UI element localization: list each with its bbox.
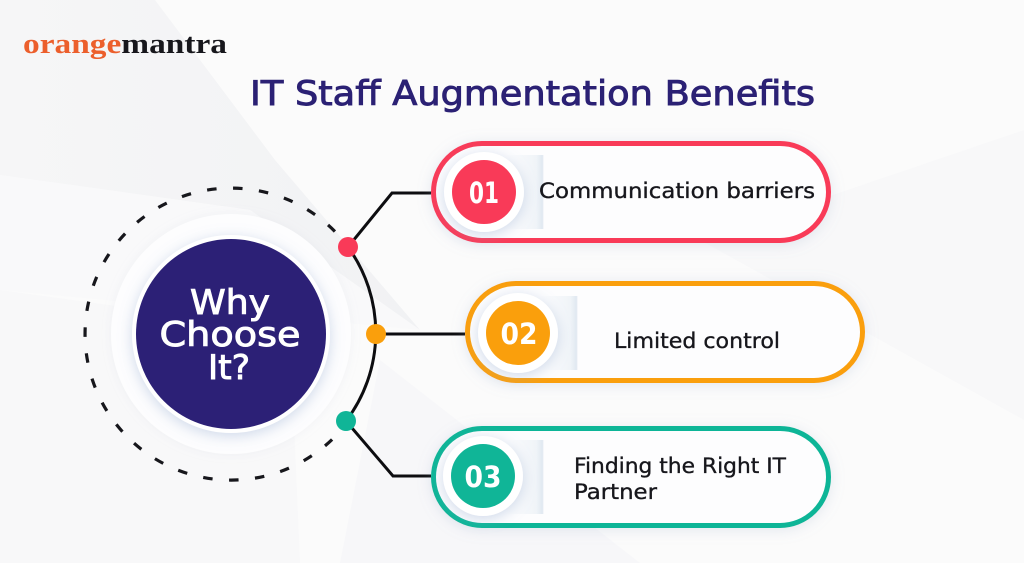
central label [160,283,300,388]
panel: 03 finding the right IT partner [434,428,828,526]
connector dot: red [338,237,358,257]
panel: 01 communication barriers: 01 [469,176,499,210]
central circle [111,214,351,454]
panel: 01 communication barriers: Communication barriers [539,179,815,203]
panel: 03 finding the right IT partner: Finding the Right IT [574,454,786,478]
panel: 02 limited control [468,284,862,380]
panel: 01 communication barriers [434,144,828,240]
central label: Why [190,283,270,323]
panel: 02 limited control: 02 [500,317,538,351]
panel: 03 finding the right IT partner: 03 [464,460,502,494]
central label: It? [208,348,250,388]
central label: Choose [160,315,300,355]
title: IT Staff Augmentation Benefits [250,74,815,114]
connector lines [346,193,465,476]
panel: 02 limited control: Limited control [614,329,780,353]
connector dot: orange [366,324,386,344]
dashed orbit [85,188,336,480]
panel: 03 finding the right IT partner: Partner [574,480,657,504]
connector dot: green [336,411,356,431]
logo: orange mantra [23,28,228,60]
